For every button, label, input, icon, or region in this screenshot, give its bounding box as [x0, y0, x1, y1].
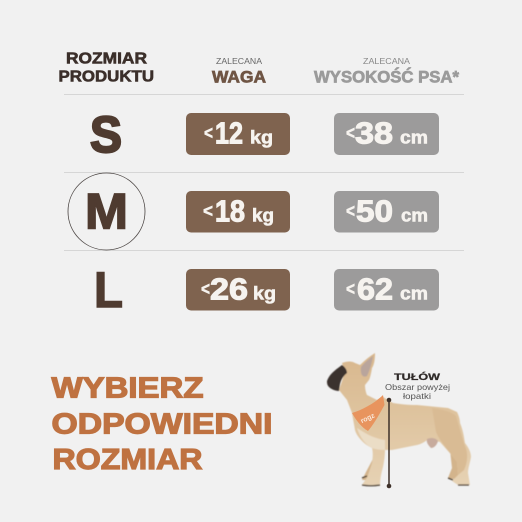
dog belly detail: [427, 438, 438, 448]
weight badge S: kg: [250, 128, 273, 148]
heading: recommended dog height column: [314, 57, 460, 86]
size letter L: L: [94, 262, 123, 318]
dog chest: [357, 428, 385, 450]
far legs: [362, 450, 462, 480]
heading: product size column: PRODUKTU: [58, 68, 154, 86]
dog paws: [362, 476, 469, 486]
heading: product size column: ROZMIAR: [66, 50, 147, 68]
height badge L: [334, 269, 439, 310]
title: choose the right size: [52, 372, 272, 476]
height badge M: 50: [356, 194, 393, 228]
weight badge L: [186, 269, 290, 310]
size M with circle: M: [85, 184, 128, 240]
weight badge M: [186, 191, 290, 232]
weight badge L: 26: [210, 272, 248, 306]
dog body: [339, 353, 471, 486]
weight badge M: <: [203, 201, 213, 221]
height badge M: [334, 191, 439, 232]
height badge M: <: [346, 201, 355, 221]
label: torso: [385, 371, 450, 401]
weight badge S: <: [204, 123, 213, 143]
dog photo shapes: [327, 353, 471, 486]
title: choose the right size: ODPOWIEDNI: [52, 408, 272, 440]
height badge L: cm: [400, 284, 428, 304]
heading: recommended dog height column: ZALECANA: [363, 57, 411, 66]
bandana: [352, 395, 384, 431]
weight badge M: kg: [252, 206, 274, 226]
dog hind shading: [432, 408, 467, 475]
height marker: [387, 398, 391, 488]
heading: product size column: [58, 50, 154, 86]
illustration: dog with bandana and height marker: [327, 353, 471, 488]
heading: recommended weight column: [212, 57, 266, 86]
height badge S: 38: [355, 116, 393, 150]
size letter S: S: [90, 106, 122, 163]
weight badge S: [186, 113, 290, 155]
heading: recommended weight column: ZALECANA: [216, 57, 263, 66]
size M with circle: [68, 173, 145, 250]
height badge S: cm: [400, 128, 428, 148]
bandana logo: rogz: [360, 412, 377, 425]
label: torso: TUŁÓW: [394, 371, 440, 383]
heading: recommended weight column: WAGA: [212, 68, 266, 86]
height badge M: cm: [401, 206, 428, 226]
dog ear: [361, 356, 373, 377]
height badge L: <: [346, 279, 355, 299]
weight badge S: 12: [215, 116, 243, 150]
height badge S: <: [346, 123, 355, 143]
heading: recommended dog height column: WYSOKOŚĆ PSA*: [314, 68, 460, 86]
title: choose the right size: ROZMIAR: [52, 444, 202, 476]
weight badge M: 18: [215, 194, 245, 228]
height badge L: 62: [357, 272, 393, 306]
weight badge L: <: [201, 279, 210, 299]
weight badge L: kg: [253, 284, 276, 304]
height badge S: [334, 113, 439, 155]
title: choose the right size: WYBIERZ: [52, 372, 204, 404]
label: torso: łopatki: [403, 391, 431, 401]
label: torso: Obszar powyżej: [385, 382, 450, 392]
dog muzzle and nose: [327, 365, 347, 391]
